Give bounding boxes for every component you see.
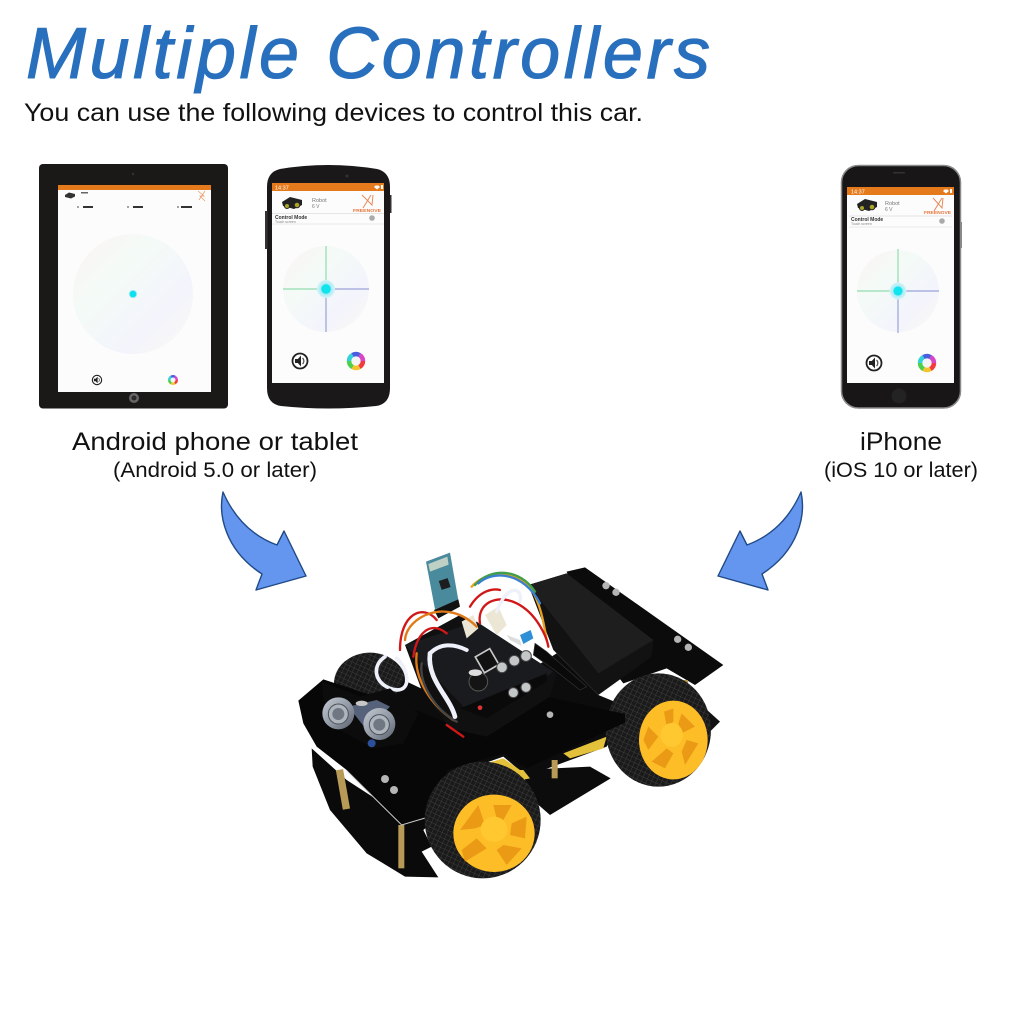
- rear left wheel: [334, 653, 406, 714]
- battery box: [528, 573, 653, 695]
- front wheel: [425, 762, 541, 878]
- label: iPhone: (iOS 10 or later): [824, 459, 978, 482]
- bluetooth module: [426, 553, 460, 618]
- upper plate: [298, 679, 625, 825]
- label: iPhone: iPhone: [860, 428, 942, 456]
- subtitle: You can use the following devices to control this car.: [24, 99, 643, 127]
- device: iPhone: FREENOVE: [924, 210, 951, 215]
- label: Android: Android phone or tablet: [72, 428, 358, 456]
- device: Android phone: FREENOVE: [353, 208, 381, 213]
- arrow: right: [718, 492, 802, 590]
- robot car thumbnail: [282, 197, 302, 209]
- device: Android phone: 14:37: [275, 186, 289, 192]
- upper plate front edge: [347, 771, 447, 825]
- ultrasonic sensor: [322, 682, 418, 748]
- device: iPhone: Touch screen: [851, 222, 872, 226]
- lower front plate: [312, 748, 447, 877]
- device: Android phone: Touch screen: [275, 220, 296, 224]
- upper plate screws: [381, 711, 553, 794]
- rear plate screws: [602, 582, 692, 651]
- device: iPhone: 6 V: [885, 207, 893, 213]
- wires: [376, 573, 548, 737]
- title: Multiple Controllers: [26, 14, 710, 94]
- power plug: [533, 643, 587, 690]
- lower mid plate: [520, 767, 611, 815]
- device: iPhone: [841, 165, 962, 408]
- right gear motor: [563, 737, 607, 758]
- robot car thumbnail: [857, 199, 877, 211]
- device: Android phone: [265, 165, 392, 408]
- robot car: [298, 553, 723, 878]
- right rear side tab: [700, 707, 720, 732]
- standoffs: [336, 680, 688, 868]
- device: Android phone: 6 V: [312, 204, 320, 210]
- label: Android: (Android 5.0 or later): [113, 459, 317, 482]
- control board stack: [405, 607, 557, 737]
- device: Android tablet: [39, 164, 228, 408]
- gear motors: [435, 758, 530, 793]
- rear plate: [567, 567, 723, 685]
- device: iPhone: 14:37: [851, 190, 865, 196]
- right wheel: [606, 673, 711, 787]
- device: iPhone: Robot: [885, 201, 900, 207]
- device: iPhone: Control Mode: [851, 217, 883, 223]
- device: Android phone: Control Mode: [275, 215, 307, 221]
- label: iPhone: [824, 428, 978, 482]
- chassis underside: [390, 653, 627, 780]
- arrow: left: [222, 492, 306, 590]
- device: Android phone: Robot: [312, 198, 327, 204]
- label: Android: [72, 428, 358, 482]
